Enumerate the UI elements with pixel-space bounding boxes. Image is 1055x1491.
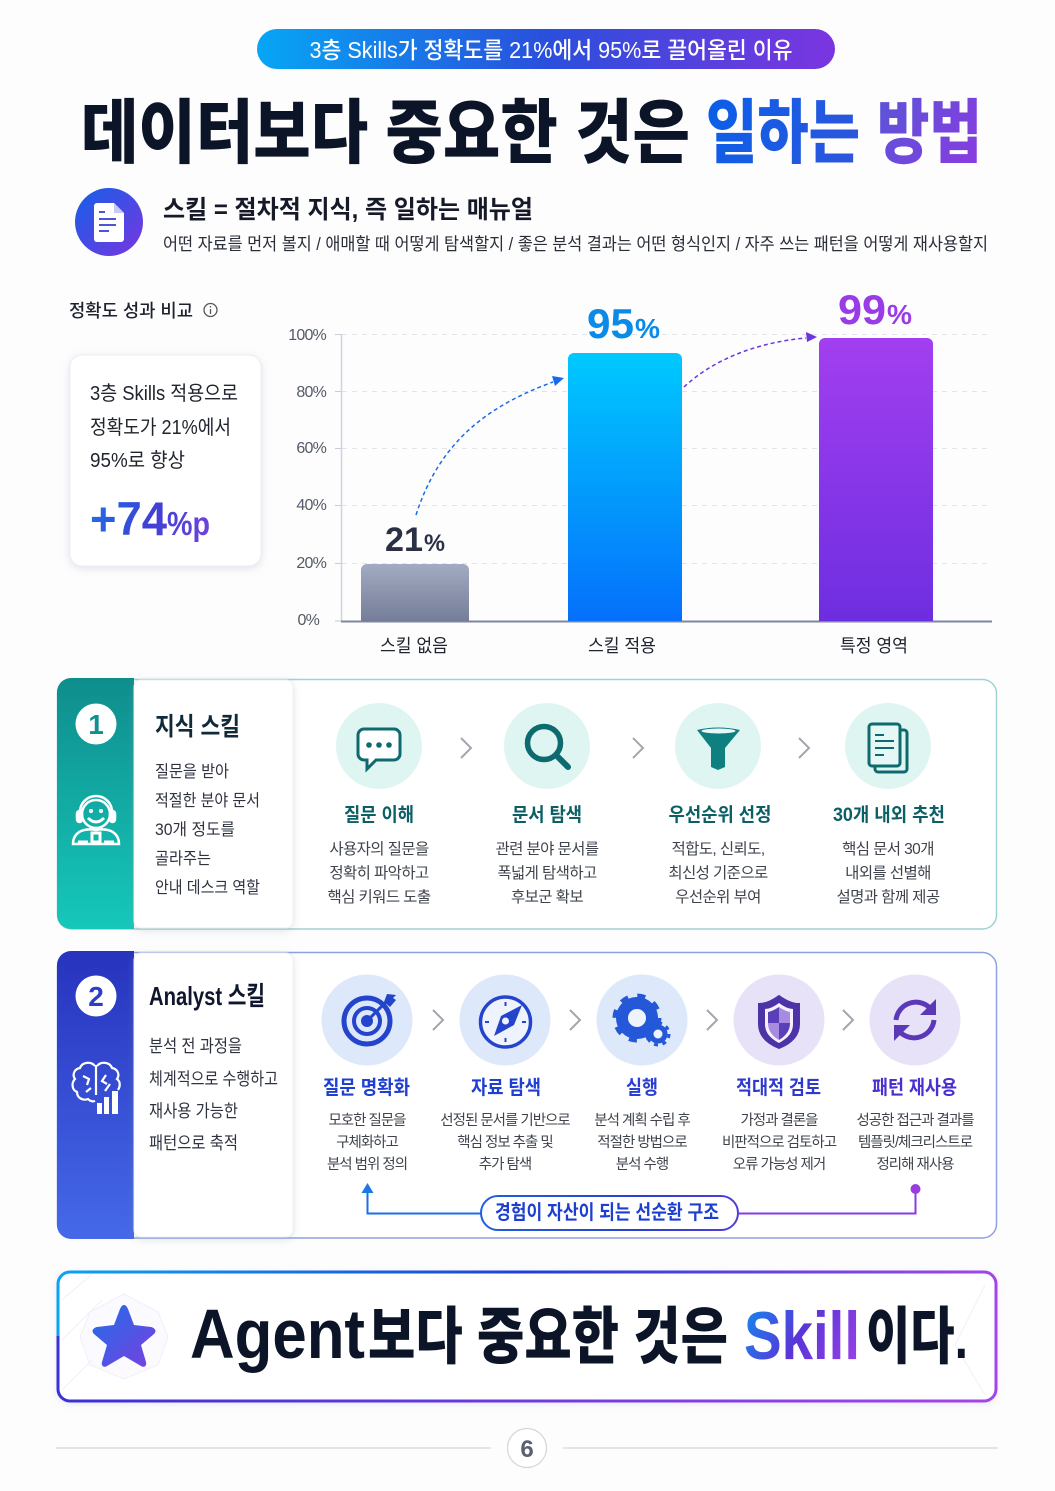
metric: +74%p: +74 [90,492,167,545]
badge 2: 2 [88,981,104,1012]
step: adversarial review: 가정과 결론을 [740,1112,818,1129]
text block: analyst: 분석 전 과정을 [149,1036,242,1056]
bar chart: 80% [296,384,327,401]
step: search: 폭넓게 탐색하고 [497,864,597,882]
feedback loop [362,1183,920,1230]
step: recommend: 30개 내외 추천 [833,804,945,826]
description: 어떤 자료를 먼저 볼지 / 애매할 때 어떻게 탐색할지 / 좋은 분석 결과는 어떤 형식인지 / 자주 쓰는 패턴을 어떻게 재사용할지 [163,234,988,254]
step: clarify: 분석 범위 정의 [327,1156,407,1173]
heading: analyst: Analyst 스킬 [149,981,265,1011]
step: pattern reuse [856,974,974,1173]
step: pattern reuse: 정리해 재사용 [876,1156,954,1173]
text block: role [155,762,260,897]
arrow [570,1010,580,1030]
step: question: 사용자의 질문을 [329,840,429,858]
page number [56,1428,998,1468]
text block: analyst: 체계적으로 수행하고 [149,1069,278,1089]
step: search: 후보군 확보 [511,888,583,906]
icon: document [75,188,143,256]
title: 방법 [877,94,982,172]
sidebar [57,951,134,1239]
badge 2 [76,976,116,1016]
step: recommend [833,703,945,906]
step: pattern reuse: 패턴 재사용 [872,1077,957,1099]
text block: role: 안내 데스크 역할 [155,878,260,897]
bar chart: 100% [288,327,327,344]
panel: result card: %p [167,505,210,542]
title: 데이터보다 중요한 것은 [81,94,690,172]
top pill banner [257,29,835,69]
icon: support agent [73,796,119,844]
step: adversarial review: 오류 가능성 제거 [733,1156,825,1173]
heading: accuracy comparison: 정확도 성과 비교 [69,301,193,321]
slogan: 이다. [866,1303,968,1372]
step: question: 정확히 파악하고 [329,864,429,882]
bar: specific domain: % [887,299,912,330]
step: explore: 선정된 문서를 기반으로 [440,1112,570,1129]
slogan: 보다 중요한 것은 [368,1303,728,1372]
banner: conclusion [58,1272,996,1401]
text block: role: 30개 정도를 [155,820,235,839]
arrow: 95 to 99 [684,332,817,387]
panel: result card [70,355,261,566]
panel: knowledge skill [57,678,996,929]
step: question: 핵심 키워드 도출 [327,888,431,906]
bar: no skill: 21 [385,521,423,559]
top pill banner: 3층 Skills가 정확도를 21%에서 95%로 끌어올린 이유 [310,37,792,63]
white text card [134,953,293,1237]
arrow [799,738,809,758]
step: priority: 적합도, 신뢰도, [671,840,765,858]
bar: no skill [361,521,469,656]
slogan [190,1295,968,1374]
step: priority [668,703,772,906]
step: pattern reuse: 성공한 접근과 결과를 [856,1112,974,1129]
step: explore: 자료 탐색 [471,1077,541,1099]
white text card [134,680,293,928]
badge 1: 1 [88,709,104,740]
arrow [633,738,643,758]
step: execute: 분석 계획 수립 후 [594,1112,690,1129]
arrow [433,1010,443,1030]
step: clarify [322,974,412,1173]
step: clarify: 구체화하고 [336,1134,399,1151]
step: execute [594,974,690,1173]
bar chart: 0% [297,612,320,629]
step: question: 질문 이해 [344,804,414,826]
step: priority: 우선순위 부여 [675,888,761,906]
step: recommend: 핵심 문서 30개 [842,840,934,858]
bar: no skill: % [424,530,445,557]
step: priority: 우선순위 선정 [668,804,772,826]
sidebar [57,678,134,929]
arrow [461,738,471,758]
step: execute: 적절한 방법으로 [597,1134,687,1151]
bar chart: 60% [296,440,327,457]
bar: skill applied: % [635,313,660,344]
bar: specific domain [819,286,933,656]
bar: specific domain: 99 [838,286,886,333]
step: recommend: 설명과 함께 제공 [836,888,940,906]
step: priority: 최신성 기준으로 [668,864,768,882]
step: search [495,703,599,906]
bar: skill applied [568,300,682,656]
step: clarify: 모호한 질문을 [328,1112,406,1129]
step: explore [440,974,570,1173]
step: execute: 분석 수행 [616,1156,668,1173]
bar chart: 40% [296,497,327,514]
slogan: Agent [190,1295,365,1373]
title: 일하는 [706,94,860,172]
page number: 6 [520,1436,534,1463]
text block: role: 골라주는 [155,849,211,868]
heading: knowledge: 지식 스킬 [155,713,240,741]
step: explore: 핵심 정보 추출 및 [457,1134,553,1151]
panel: result card: 정확도가 21%에서 [90,416,231,439]
text block: role: 질문을 받아 [155,762,229,781]
arrow [843,1010,853,1030]
subtitle: 스킬 = 절차적 지식, 즉 일하는 매뉴얼 [163,196,533,224]
icon: star [93,1305,155,1367]
slogan: Skill [744,1298,860,1374]
bar: specific domain: 특정 영역 [840,636,908,656]
step: explore: 추가 탐색 [479,1156,531,1173]
step: pattern reuse: 템플릿/체크리스트로 [858,1134,973,1151]
step: search: 관련 분야 문서를 [495,840,599,858]
step: clarify: 질문 명확화 [323,1077,410,1099]
loop label [481,1196,738,1230]
panel: analyst skill [57,951,996,1239]
decorative glow [62,1274,985,1395]
panel: result card: 3층 Skills 적용으로 [90,382,238,405]
text block: analyst: 패턴으로 축적 [149,1133,238,1153]
loop label: 경험이 자산이 되는 선순환 구조 [495,1201,719,1224]
text block: analyst: 재사용 가능한 [149,1101,238,1121]
bar: skill applied: 스킬 적용 [588,636,656,656]
bar: no skill: 스킬 없음 [380,636,448,656]
panel: result card: 95%로 향상 [90,449,185,472]
bar: skill applied: 95 [587,300,634,347]
step: execute: 실행 [626,1077,658,1099]
step: question [327,703,431,906]
step: adversarial review: 적대적 검토 [736,1077,821,1099]
step: adversarial review: 비판적으로 검토하고 [722,1134,837,1151]
step: recommend: 내외를 선별해 [845,864,931,882]
bar chart: 20% [296,555,327,572]
text block: role: 적절한 분야 문서 [155,791,260,810]
arrow [707,1010,717,1030]
step: adversarial review [722,974,837,1173]
arrow: 21 to 95 [416,376,564,515]
icon: brain chart [73,1063,120,1114]
step: search: 문서 탐색 [512,804,582,826]
bar chart [288,286,992,656]
badge 1 [76,704,116,744]
text block: analyst [149,1036,278,1153]
